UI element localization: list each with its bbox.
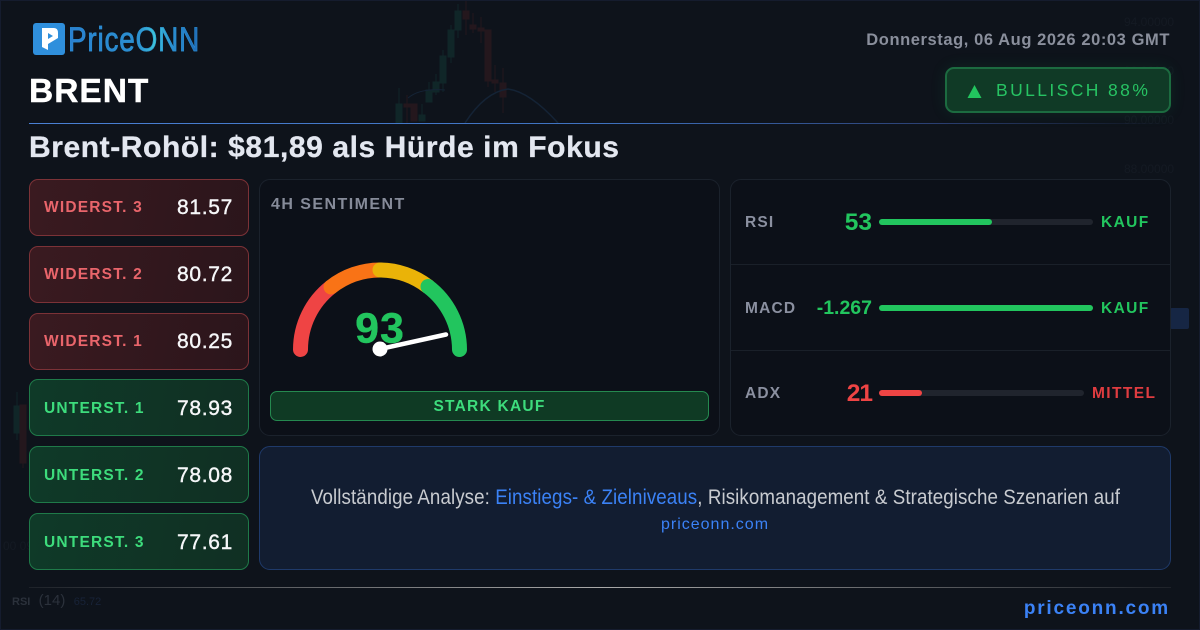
indicator row: ADX: 21 bbox=[847, 380, 872, 407]
panel: analysis banner bbox=[259, 446, 1171, 570]
date line: Donnerstag, 06 Aug 2026 20:03 GMT bbox=[866, 31, 1170, 49]
indicator row: RSI: RSI bbox=[745, 214, 774, 231]
footer brand: priceonn.com bbox=[1024, 598, 1170, 619]
signal bar: strong buy: STARK KAUF bbox=[433, 398, 546, 415]
background: faint candlestick chart: 00 09 bbox=[3, 539, 33, 553]
panel: support 3: 77.61 bbox=[177, 531, 233, 554]
signal bar: strong buy bbox=[270, 391, 709, 421]
indicator row: RSI: 53 bbox=[845, 209, 872, 236]
background: faint candlestick chart: 94.00000 bbox=[1124, 15, 1174, 29]
icon: up triangle bbox=[968, 85, 982, 98]
banner text: Vollständige Analyse: Einstiegs- & Zielniveaus, Risikomanagement & Strategische Szenarien auf bbox=[311, 486, 1120, 509]
indicator row: ADX: MITTEL bbox=[1092, 385, 1156, 402]
panel: resistance 3: WIDERST. 3 bbox=[44, 199, 143, 216]
background: faint candlestick chart: 92.00000 bbox=[1124, 64, 1174, 78]
panel: support 3: UNTERST. 3 bbox=[44, 534, 145, 551]
headline: Brent-Rohöl: $81,89 als Hürde im Fokus bbox=[29, 131, 620, 164]
row divider 2 bbox=[731, 350, 1170, 351]
badge: bullish bbox=[945, 67, 1171, 113]
panel: resistance 2: 80.72 bbox=[177, 263, 233, 286]
panel: support 1: 78.93 bbox=[177, 397, 233, 420]
row divider 1 bbox=[731, 264, 1170, 265]
panel: 4H sentiment bbox=[259, 179, 720, 436]
background: faint candlestick chart: 88.00000 bbox=[1124, 162, 1174, 176]
indicator row: RSI: KAUF bbox=[1101, 214, 1150, 231]
panel: support 2 bbox=[29, 446, 249, 503]
heading: BRENT: BRENT bbox=[29, 73, 149, 110]
indicator row: MACD: MACD bbox=[745, 300, 796, 317]
gauge value: 93 bbox=[355, 304, 405, 352]
panel: resistance 2 bbox=[29, 246, 249, 303]
indicator row: ADX: ADX bbox=[745, 385, 781, 402]
panel: support 2: 78.08 bbox=[177, 464, 233, 487]
panel: resistance 2: WIDERST. 2 bbox=[44, 266, 143, 283]
gauge bbox=[293, 262, 467, 357]
panel: support 1 bbox=[29, 379, 249, 436]
indicator row: ADX bbox=[745, 380, 1156, 407]
panel: resistance 3 bbox=[29, 179, 249, 236]
header divider bbox=[29, 123, 1171, 124]
logo: PriceONN bbox=[33, 21, 200, 59]
panel: resistance 3: 81.57 bbox=[177, 196, 233, 219]
panel: resistance 1 bbox=[29, 313, 249, 370]
panel: support 3 bbox=[29, 513, 249, 570]
sentiment heading: 4H SENTIMENT bbox=[271, 196, 406, 213]
badge text: BULLISCH 88% bbox=[996, 80, 1150, 100]
banner link: priceonn.com bbox=[661, 516, 769, 533]
indicator row: MACD: -1.267 bbox=[817, 297, 872, 319]
logo wordmark: PriceONN bbox=[68, 21, 200, 59]
faint chart legend: RSI: RSI (14) 65.72 bbox=[12, 592, 101, 609]
panel: indicators bbox=[730, 179, 1171, 436]
panel: resistance 1: WIDERST. 1 bbox=[44, 333, 143, 350]
panel: resistance 1: 80.25 bbox=[177, 330, 233, 353]
panel: support 2: UNTERST. 2 bbox=[44, 467, 145, 484]
icon: logo P mark bbox=[33, 23, 65, 55]
background: faint candlestick chart: 90.00000 bbox=[1124, 113, 1174, 127]
indicator row: RSI bbox=[745, 209, 1150, 236]
indicator row: MACD bbox=[745, 297, 1150, 319]
gauge needle bbox=[372, 334, 446, 356]
indicator row: MACD: KAUF bbox=[1101, 300, 1150, 317]
footer divider bbox=[29, 587, 1171, 588]
panel: support 1: UNTERST. 1 bbox=[44, 400, 145, 417]
